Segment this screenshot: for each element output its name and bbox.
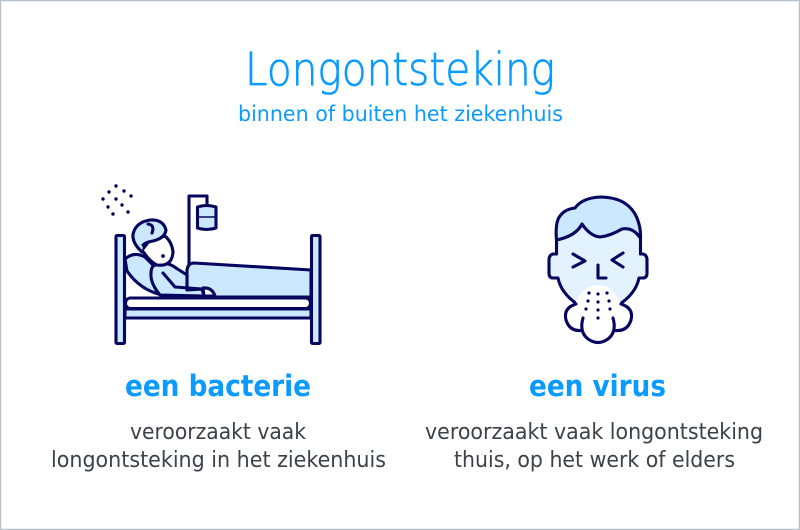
icon: drip bag <box>197 206 216 230</box>
icon: right bed post <box>312 236 320 344</box>
icon: patient body <box>151 263 204 296</box>
icon: bacteria dots <box>101 184 133 216</box>
icon: bed frame rail <box>125 309 311 318</box>
icon: eyes <box>573 253 623 267</box>
illustration: coughing face <box>549 197 647 342</box>
icon: cough cloud <box>565 285 632 342</box>
icon: hand <box>203 288 215 296</box>
text: virus description: thuis, op het werk of elders <box>454 448 735 473</box>
icon: blanket <box>187 263 311 297</box>
icon: cough droplets <box>584 291 612 320</box>
title: Longontsteking <box>245 43 555 96</box>
icon: mattress <box>126 298 310 308</box>
text: bacteria description <box>51 420 386 473</box>
heading: een virus: een virus <box>529 369 666 403</box>
icon: nose <box>598 265 606 278</box>
text: virus description <box>425 420 763 473</box>
icon: head and ears <box>549 215 647 304</box>
icon: left bed post <box>116 236 124 344</box>
icon: drip pole <box>189 196 207 266</box>
text: bacteria description: veroorzaakt vaak <box>130 420 306 445</box>
text: bacteria description: longontsteking in het ziekenhuis <box>51 448 386 473</box>
subtitle: binnen of buiten het ziekenhuis <box>238 102 563 127</box>
icon: eye <box>161 254 165 258</box>
icon: face <box>142 236 173 265</box>
illustration: patient in hospital bed <box>101 184 320 344</box>
text: virus description: veroorzaakt vaak longontsteking <box>425 420 763 445</box>
heading: een bacterie: een bacterie <box>125 369 311 403</box>
icon: arm line <box>163 273 204 296</box>
icon: hair <box>556 197 641 240</box>
icon: hair <box>133 220 166 252</box>
icon: pillow <box>125 254 168 295</box>
